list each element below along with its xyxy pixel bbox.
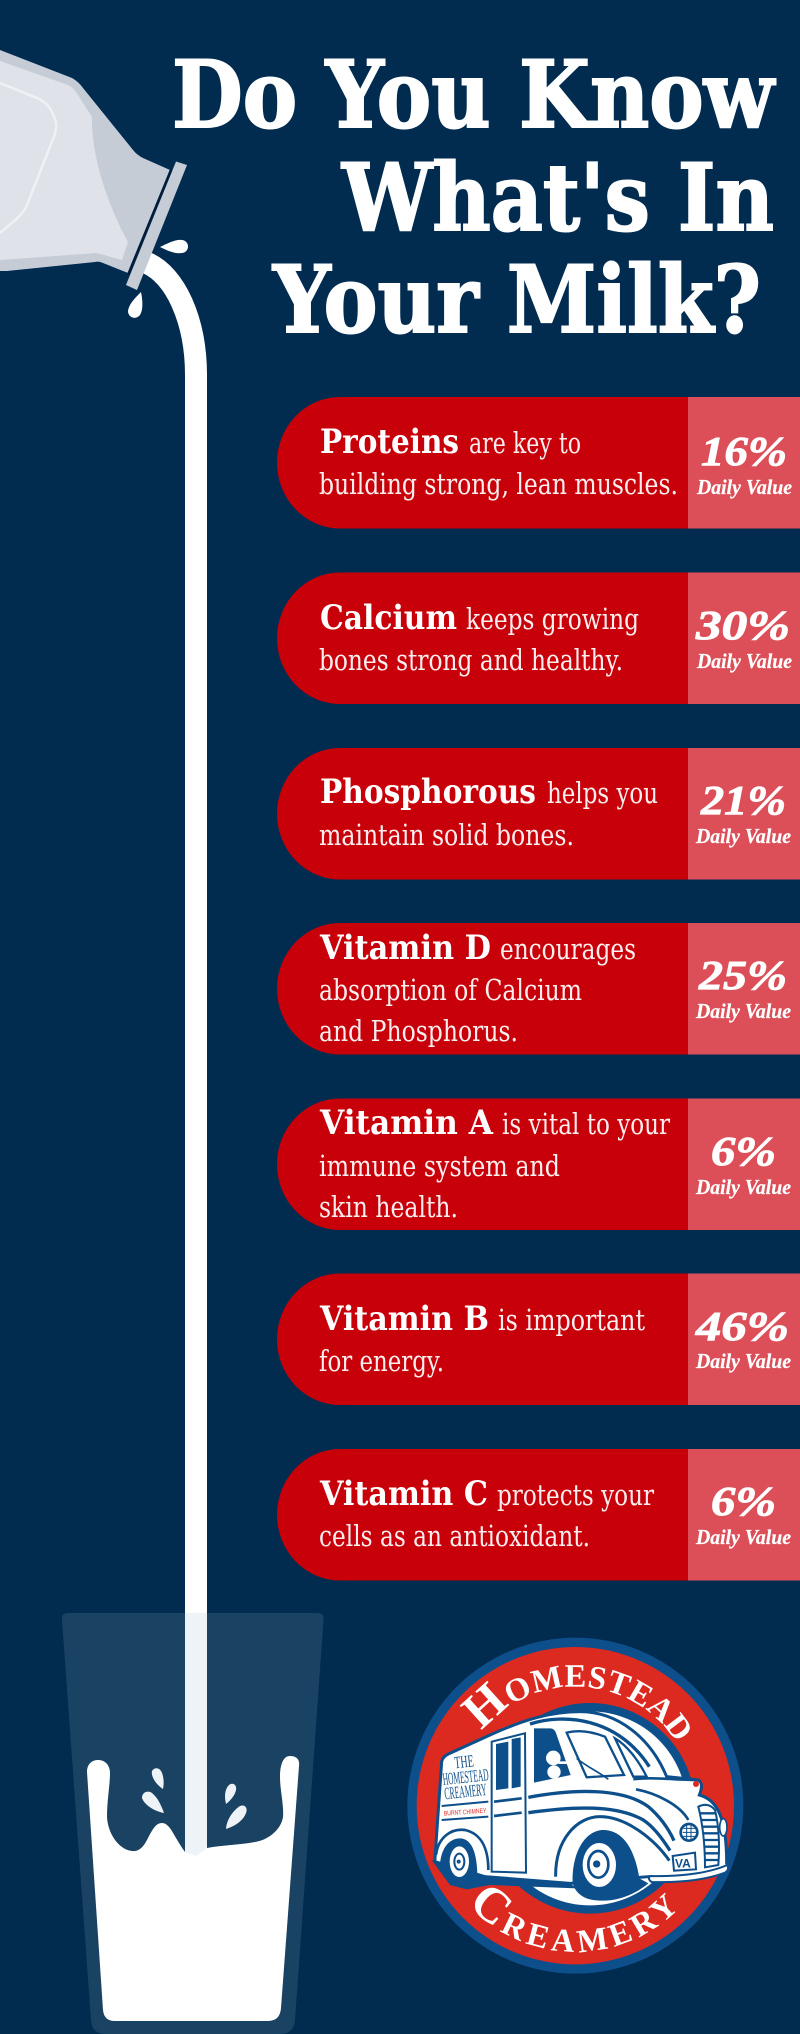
panel: Calcium: Daily Value [696,649,792,673]
panel: Vitamin D: 25% [698,952,787,998]
milk jug pouring [0,50,188,318]
panel: Calcium [277,572,800,704]
licence plate [673,1853,696,1871]
panel: Vitamin A: is vital to your [502,1107,670,1141]
jug label outline [0,83,56,233]
panel: Phosphorous: 21% [700,777,786,823]
panel: Vitamin A: Daily Value [695,1175,791,1199]
panel: Vitamin D: encourages [500,932,636,966]
panel: Proteins [277,397,800,528]
panel: Proteins: 16% [701,428,787,474]
panel: Proteins: building strong, lean muscles. [319,467,678,501]
panel: Vitamin B [277,1274,800,1405]
panel: Vitamin B: is important [498,1303,645,1337]
grille [698,1805,719,1867]
logo wordmark: Creamery: CREAMERY [475,1888,676,1953]
delivery van: BURNT CHIMNEY [444,1808,487,1818]
panel: Vitamin A: skin health. [319,1190,458,1224]
jug neck flange [126,162,187,290]
panel: Vitamin D: Vitamin D [319,928,491,968]
rear wheel [436,1830,488,1870]
delivery van: CREAMERY [443,1780,488,1803]
licence plate: VA [675,1856,691,1870]
windshield [567,1731,624,1777]
panel: Phosphorous: Phosphorous [320,772,536,812]
panel: Phosphorous: helps you [547,776,658,810]
jug light face [0,61,128,260]
delivery van [432,1712,729,1901]
milk glass [62,1613,324,2034]
cab roof line [530,1719,649,1767]
front wheel [556,1817,669,1877]
van body [435,1712,729,1883]
panel: Vitamin C: Daily Value [695,1525,791,1549]
panel: Vitamin C: protects your [497,1478,654,1512]
panel: Vitamin B: Daily Value [695,1349,791,1373]
panel: Vitamin D: Daily Value [695,999,791,1023]
logo: Homestead Creamery [407,1638,744,1974]
panel: Vitamin D [277,923,800,1054]
panel: Phosphorous: maintain solid bones. [319,818,574,852]
milk stream [147,263,196,1613]
jug shell [0,50,170,273]
van lettering: THE [453,1751,475,1772]
delivery van: HOMESTEAD [442,1765,489,1789]
panel: Vitamin B: Vitamin B [319,1299,489,1339]
rear shadow [432,1860,577,1889]
logo wordmark: Homestead: HOMESTEAD [460,1665,690,1738]
panel: Proteins: Proteins [320,422,459,462]
panel: Calcium: keeps growing [466,602,639,636]
panel: Vitamin A [277,1098,800,1230]
hood line [633,1778,700,1780]
panel: Phosphorous [277,748,800,880]
panel: Calcium: 30% [695,602,790,648]
bumper [649,1865,728,1882]
spout droplets [160,240,188,253]
panel: Vitamin D: and Phosphorus. [319,1014,518,1048]
panel: Calcium: Calcium [320,598,457,638]
driver window [534,1728,571,1783]
panel: Vitamin A: Vitamin A [319,1103,494,1143]
panel: Calcium: bones strong and healthy. [319,643,623,677]
side stripes [528,1791,674,1841]
milk stream inside glass [185,1613,207,1858]
panel: Proteins: are key to [469,426,581,460]
panel: Vitamin B: for energy. [319,1344,444,1378]
door [492,1733,526,1873]
panel: Proteins: Daily Value [696,475,792,499]
panel: Phosphorous: Daily Value [695,824,791,848]
panel: Vitamin B: 46% [695,1303,789,1349]
headlight [681,1824,697,1841]
panel: Vitamin D: absorption of Calcium [319,973,582,1007]
splash droplets [152,1768,164,1789]
panel: Vitamin C [277,1449,800,1580]
panel: Vitamin C: Vitamin C [319,1474,488,1514]
panel: Vitamin A: 6% [711,1128,776,1174]
milk with splash [87,1756,299,2021]
panel: Vitamin A: immune system and [319,1149,560,1183]
panel: Vitamin C: 6% [711,1478,776,1524]
title [172,40,776,354]
panel: Vitamin C: cells as an antioxidant. [319,1519,590,1553]
